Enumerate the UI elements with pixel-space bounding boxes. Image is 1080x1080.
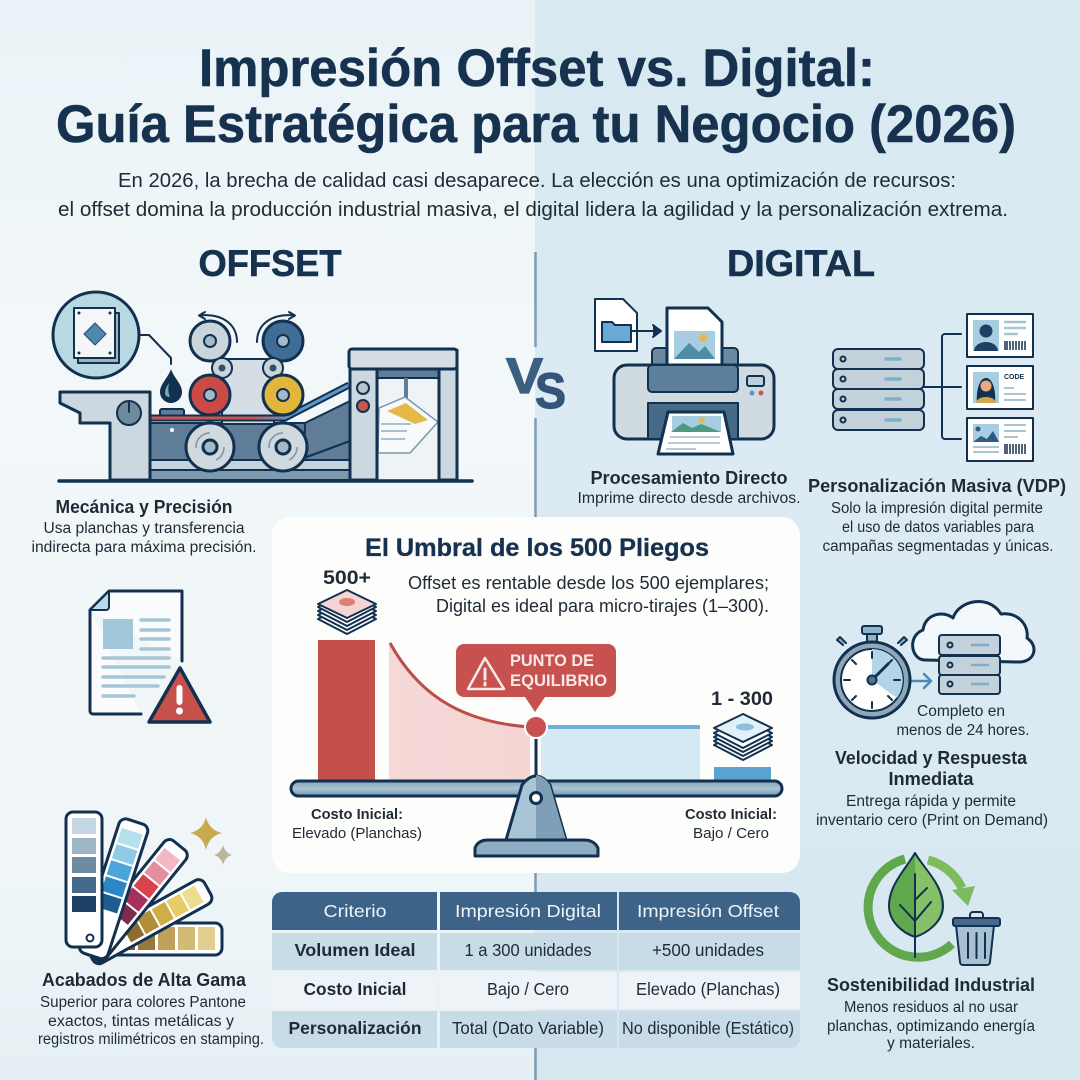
label: offset initial cost: Elevado (Planchas) [292,825,422,842]
row: costo inicial: Bajo / Cero [487,979,569,999]
icon: sustainability [868,853,1000,965]
card 2 [967,366,1033,409]
text: mecánica y precisión: indirecta para máxima precisión. [32,539,256,556]
icon: pantone fan [66,812,232,966]
text: sostenibilidad industrial: y materiales. [887,1035,975,1052]
area: offset cost curve [389,642,530,781]
area: digital cost [541,725,700,781]
table: comparison [272,892,800,1048]
intro text: En 2026, la brecha de calidad casi desaparece. La elección es una optimización de recursos: [118,169,956,192]
card heading: El Umbral de los 500 Pliegos [365,534,709,562]
title [56,39,1016,154]
base [150,423,352,480]
card 3 [967,418,1033,461]
row: personalización [272,1011,800,1048]
row: personalización: Personalización [288,1018,422,1038]
feed table [60,392,150,480]
label: digital initial cost: Costo Inicial: [685,807,777,823]
text: completo en 24 horas [896,703,1030,739]
bar: digital initial cost [714,767,771,781]
text: procesamiento directo [578,468,800,507]
text: personalización masiva: campañas segmentadas y únicas. [822,538,1054,555]
grey strip [66,812,102,947]
icon: stopwatch and cloud [834,602,1034,718]
text: procesamiento directo: Imprime directo desde archivos. [578,490,800,507]
background: digital side [535,0,1080,1080]
text: sostenibilidad industrial [827,975,1035,1052]
icon: variable data [833,314,1033,461]
gold strip [83,877,214,966]
card description: Offset es rentable desde los 500 ejemplares; [408,572,769,593]
header row: Impresión Digital [455,901,601,921]
icon: red paper stack [318,590,376,634]
label 500+: 500+ [323,568,371,589]
row: personalización: No disponible (Estático) [622,1018,794,1038]
plate callout [53,292,171,378]
roller cradle [222,359,274,424]
text: mecánica y precisión: Mecánica y Precisión [56,497,232,517]
callout: punto de equilibrio: EQUILIBRIO [510,671,607,690]
label: digital initial cost [685,807,777,842]
text: velocidad y respuesta: Entrega rápida y permite [846,793,1016,810]
text: velocidad y respuesta: Velocidad y Respuesta [835,748,1028,768]
break-even point [525,716,547,780]
bar: offset initial cost [318,640,375,781]
text: procesamiento directo: Procesamiento Directo [590,468,788,488]
stopwatch [862,626,882,634]
text: acabados de alta gama: Superior para colores Pantone [40,994,246,1011]
label: digital initial cost: Bajo / Cero [693,825,769,842]
icon: blue paper stack [714,714,772,760]
text: sostenibilidad industrial: planchas, optimizando energía [827,1018,1035,1035]
balance beam [291,781,782,796]
server [833,349,924,430]
row: volumen ideal: 1 a 300 unidades [464,940,592,960]
printed sheet [658,412,733,454]
text: mecánica y precisión: Usa planchas y transferencia [44,520,245,537]
heading: offset: OFFSET [198,243,342,284]
card description [408,572,769,616]
icon: offset press [53,292,472,481]
text: completo en 24 horas: menos de 24 hores. [896,722,1030,739]
text: mecánica y precisión [32,497,256,556]
VS mark [506,348,566,419]
text: personalización masiva: Personalización Masiva (VDP) [808,476,1066,496]
title: Impresión Offset vs. Digital: [199,39,875,98]
text: acabados de alta gama: Acabados de Alta Gama [42,970,247,990]
VS mark: S [535,363,566,419]
trash can [956,925,994,965]
sparkles [190,817,222,850]
belt [150,385,349,418]
row: volumen ideal: +500 unidades [652,940,764,960]
cloud [913,602,1034,662]
text: completo en 24 horas: Completo en [917,703,1005,720]
source file [595,299,637,351]
icon: variable data: CODE [1004,374,1025,381]
red strip [80,837,190,964]
callout: punto de equilibrio [456,644,616,712]
text: velocidad y respuesta [816,748,1048,829]
blue strip [77,817,150,960]
text: acabados de alta gama: registros milimétricos en stamping. [38,1031,264,1048]
ground line [59,479,472,483]
row: volumen ideal: Volumen Ideal [294,940,416,960]
row: personalización: Total (Dato Variable) [452,1018,604,1038]
header row: Criterio [324,901,386,921]
text: acabados de alta gama: exactos, tintas metálicas y [48,1013,234,1030]
icon: document warning [90,591,210,722]
rollers [186,312,307,471]
header row: Impresión Offset [637,901,779,921]
delivery frame [377,368,439,480]
callout: punto de equilibrio: PUNTO DE [510,651,594,670]
connector [924,334,961,439]
printer back [652,348,738,380]
text: velocidad y respuesta: Inmediata [888,769,974,789]
arrow [910,674,931,688]
balance pivot [475,775,598,856]
leaf [889,853,943,937]
title: Guía Estratégica para tu Negocio (2026) [56,95,1016,154]
panel: break-even card [272,517,800,873]
text: velocidad y respuesta: inventario cero (Print on Demand) [816,812,1048,829]
intro text: el offset domina la producción industrial masiva, el digital lidera la agilidad y la personalización extrema. [58,198,1008,221]
heading: digital: DIGITAL [727,243,875,284]
intro text [58,169,1008,221]
label 1-300: 1 - 300 [711,689,773,710]
text: acabados de alta gama [38,970,264,1048]
card 1 [967,314,1033,357]
text: sostenibilidad industrial: Sostenibilidad Industrial [827,975,1035,995]
row: volumen ideal [272,933,800,970]
background: offset side [0,0,535,1080]
text: personalización masiva: Solo la impresión digital permite [831,500,1043,517]
text: personalización masiva: el uso de datos variables para [842,519,1034,536]
label: offset initial cost: Costo Inicial: [311,807,403,823]
ink drop [160,369,182,403]
recycling ring [868,859,952,957]
label: offset initial cost [292,807,422,842]
text: personalización masiva [808,476,1066,555]
icon: digital printer [595,299,774,454]
VS mark: V [506,348,544,404]
row: costo inicial: Costo Inicial [304,979,406,999]
header row [272,892,800,930]
bottom swatch strip [83,923,222,955]
row: costo inicial [272,972,800,1009]
body [614,365,774,439]
output sheet [667,308,722,366]
card description: Digital es ideal para micro-tirajes (1–300). [436,595,769,616]
text: sostenibilidad industrial: Menos residuos al no usar [844,999,1018,1016]
server [939,635,1000,694]
row: costo inicial: Elevado (Planchas) [636,979,780,999]
